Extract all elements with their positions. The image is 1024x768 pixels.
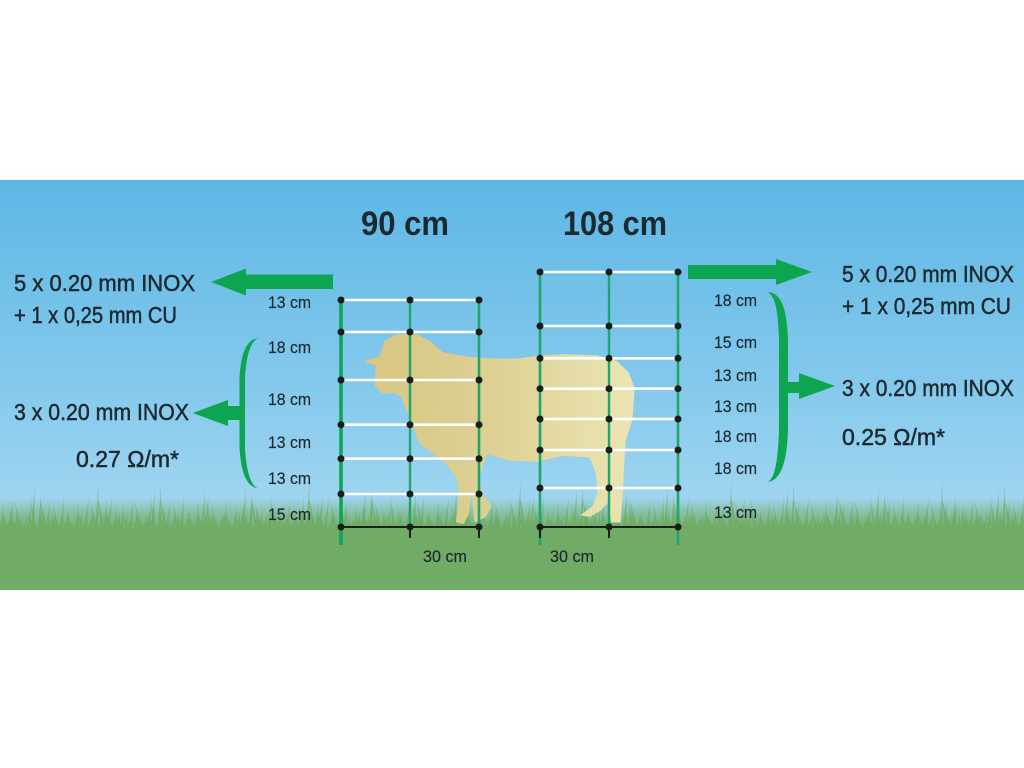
knots <box>338 296 482 530</box>
arrow: top left <box>211 268 333 296</box>
spacing labels: 108 cm fence: 18 cm <box>714 292 757 310</box>
grass blades <box>0 478 1024 528</box>
spacing labels: 90 cm fence: 13 cm <box>268 294 311 312</box>
width label: 108 cm fence: 30 cm <box>550 548 594 566</box>
spacing labels: 90 cm fence: 13 cm <box>268 470 311 488</box>
spacing labels: 90 cm fence: 13 cm <box>268 434 311 452</box>
wires <box>341 300 479 494</box>
brace and arrow: right <box>768 292 835 482</box>
heading: 90 cm: 90 cm <box>361 205 449 243</box>
posts <box>540 272 678 545</box>
width label: 90 cm fence: 30 cm <box>423 548 467 566</box>
text: left wire specification: 0.27 Ω/m* <box>76 446 179 472</box>
spacing labels: 90 cm fence: 18 cm <box>268 339 311 357</box>
text: right wire specification: 0.25 Ω/m* <box>842 424 945 450</box>
posts <box>341 300 479 545</box>
text: left wire specification <box>14 270 195 472</box>
fence: 90 cm <box>338 296 482 545</box>
text: right wire specification <box>842 261 1014 450</box>
spacing labels: 90 cm fence: 15 cm <box>268 506 311 524</box>
spacing labels: 90 cm fence: 18 cm <box>268 391 311 409</box>
knots <box>536 268 682 530</box>
arrow: top right <box>688 259 812 285</box>
spacing labels: 108 cm fence: 13 cm <box>714 504 757 522</box>
spacing labels: 108 cm fence <box>714 292 757 522</box>
sheep silhouette <box>365 335 634 523</box>
panel: sky background <box>0 180 1024 590</box>
bottom wire <box>540 527 678 538</box>
text: left wire specification: + 1 x 0,25 mm CU <box>14 302 177 328</box>
text: left wire specification: 3 x 0.20 mm INOX <box>14 399 189 425</box>
ground <box>0 528 1024 590</box>
spacing labels: 108 cm fence: 13 cm <box>714 398 757 416</box>
spacing labels: 108 cm fence: 13 cm <box>714 367 757 385</box>
spacing labels: 90 cm fence <box>268 294 311 524</box>
wires <box>540 272 678 488</box>
brace and arrow: left <box>193 338 258 488</box>
bottom wire <box>341 527 479 538</box>
text: left wire specification: 5 x 0.20 mm INOX <box>14 270 195 296</box>
spacing labels: 108 cm fence: 18 cm <box>714 460 757 478</box>
heading: 108 cm: 108 cm <box>563 205 667 243</box>
spacing labels: 108 cm fence: 15 cm <box>714 334 757 352</box>
spacing labels: 108 cm fence: 18 cm <box>714 428 757 446</box>
fence: 108 cm <box>536 268 682 545</box>
